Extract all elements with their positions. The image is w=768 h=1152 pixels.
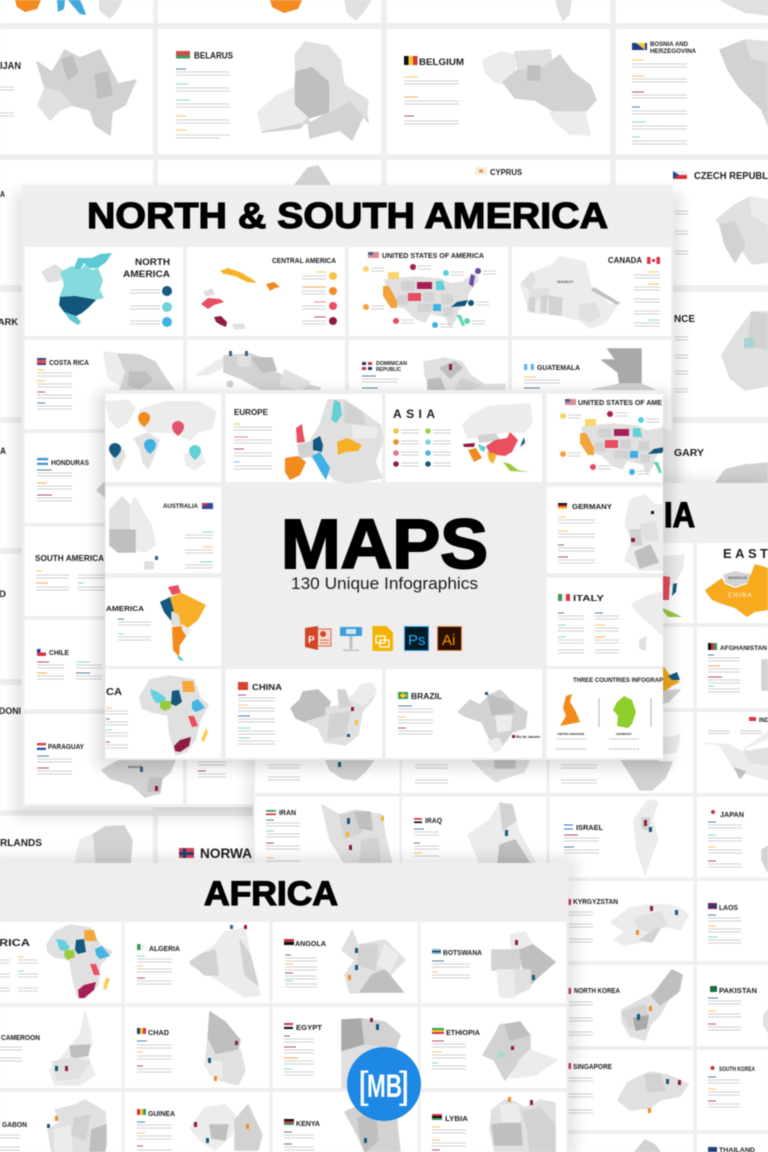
card: Costa Rica: COSTA RICA — [49, 358, 89, 367]
card: Cuba — [197, 351, 320, 390]
card: Afghanistan: AFGHANISTAN — [720, 645, 767, 652]
card: Brazil: Rio de Janeiro — [516, 735, 540, 739]
card: Kenya — [284, 1105, 400, 1152]
card: Honduras — [37, 458, 105, 501]
Belarus slide — [176, 42, 368, 140]
Netherlands slide: RLANDS — [0, 837, 42, 849]
icon: Photoshop — [404, 626, 428, 650]
card: Lybia — [432, 1097, 555, 1152]
card: Canada: NUNAVUT — [557, 280, 575, 284]
left edge slide labels: A — [0, 190, 5, 199]
card: Kenya: KENYA — [296, 1121, 320, 1128]
logo: MB badge — [347, 1047, 421, 1121]
card: East Asia: MONGOLIA — [728, 576, 748, 580]
card: North America — [42, 253, 172, 327]
heading: North & South America: NORTH & SOUTH AMERICA — [87, 195, 608, 236]
heading: Maps: MAPS — [281, 505, 488, 583]
card: East Asia: CHINA — [728, 593, 753, 599]
card: Algeria — [137, 925, 260, 997]
card: North America: NORTH — [135, 257, 170, 268]
card: Africa map — [0, 925, 112, 998]
card: Chile — [37, 649, 102, 679]
card: fragment above Iran — [268, 758, 375, 780]
card: Guinea: GUINEA — [148, 1111, 175, 1118]
card: Israel — [564, 800, 658, 874]
card: Africa — [106, 676, 208, 755]
card: Chad — [137, 1012, 245, 1085]
card: Botswana: BOTSWANA — [443, 950, 482, 957]
card: United States of America — [363, 252, 496, 328]
card: Canada: CANADA — [608, 256, 642, 265]
card: Thailand — [635, 1140, 755, 1152]
card: Asia: ASIA — [393, 407, 435, 421]
card: Three Countries Infographic — [556, 677, 664, 749]
Azerbaijan slide — [0, 50, 136, 135]
card: East Asia — [705, 546, 768, 617]
Hungary slide — [674, 448, 768, 484]
card: Chad: CHAD — [148, 1030, 169, 1037]
left edge slide labels: A — [0, 446, 6, 457]
Norway slide: NORWA — [200, 846, 252, 861]
card: Cameroon: CAMEROON — [1, 1035, 40, 1042]
icon: Google Slides — [372, 626, 393, 651]
card: Australia: AUSTRALIA — [163, 503, 198, 510]
icon: Keynote — [340, 627, 362, 651]
icon: Photoshop: Ps — [408, 632, 426, 649]
card: South America: AMERICA — [106, 604, 145, 613]
card: Brazil: BRAZIL — [411, 692, 442, 701]
card: South America — [106, 585, 206, 661]
card: Africa: CA — [106, 686, 122, 698]
card: Paraguay: PARAGUAY — [48, 744, 84, 751]
logo: MB badge: ] — [399, 1065, 410, 1107]
card: Kyrgyzstan — [568, 899, 688, 945]
card: Laos: LAOS — [719, 905, 738, 912]
Cyprus slide — [295, 166, 523, 185]
France slide — [674, 312, 768, 392]
panel: Maps cover — [97, 390, 675, 768]
logo: MB badge: [ — [358, 1065, 369, 1107]
Belarus slide: BELARUS — [194, 50, 233, 62]
card: map fragment with orange country — [650, 667, 680, 705]
card: United States of America: UNITED STATES OF AMERICA — [382, 253, 484, 260]
card: South America: SOUTH AMERICA — [35, 553, 104, 563]
card: Ethiopia: ETHIOPIA — [446, 1030, 480, 1037]
card: Dominican Republic: DOMINICAN — [376, 361, 407, 367]
card: Costa Rica — [37, 352, 174, 409]
left edge slide labels — [0, 190, 21, 717]
card: Europe: EUROPE — [234, 408, 269, 417]
card: Israel: ISRAEL — [576, 823, 603, 832]
card: Chile: CHILE — [49, 650, 69, 657]
Belgium slide — [404, 50, 596, 135]
Belgium slide: BELGIUM — [419, 57, 464, 68]
card: Pakistan: PAKISTAN — [719, 986, 757, 995]
card: Afghanistan — [708, 643, 768, 692]
card: Singapore — [568, 1063, 688, 1113]
card: Indonesia region fragment — [640, 735, 680, 790]
card: Asia map fragment — [650, 555, 684, 617]
card: Gabon: GABON — [2, 1122, 27, 1129]
France slide: NCE — [674, 313, 695, 325]
card: China — [238, 682, 376, 745]
heading: Asia: IA — [664, 496, 695, 535]
panel: North and South America — [15, 185, 680, 818]
card: Angola: ANGOLA — [295, 939, 327, 948]
icon: Illustrator — [438, 626, 462, 650]
card: Honduras: HONDURAS — [51, 460, 89, 467]
card: Three Countries Infographic: UNITED KINGDOM — [557, 732, 585, 736]
Bosnia and Herzegovina slide: HERZEGOVINA — [650, 48, 696, 55]
card: Kyrgyzstan: KYRGYZSTAN — [573, 899, 618, 906]
pin: blue — [144, 439, 156, 454]
top row map fragments — [15, 0, 768, 20]
Bosnia and Herzegovina slide — [632, 40, 768, 144]
card: India — [705, 717, 768, 780]
icon: Illustrator: Ai — [442, 632, 455, 649]
card: Ethiopia — [432, 1022, 557, 1080]
card: Lybia: LYBIA — [445, 1116, 468, 1123]
card: Egypt: EGYPT — [296, 1025, 323, 1032]
card: Australia — [110, 497, 213, 569]
card: China: CHINA — [252, 682, 282, 692]
heading: Africa: AFRICA — [204, 875, 338, 913]
card: Iraq — [414, 803, 536, 864]
card: Dominican Republic — [362, 358, 505, 390]
logo: MB badge: MB — [367, 1068, 402, 1104]
card: world map — [106, 400, 216, 472]
card: Paraguay — [37, 743, 175, 797]
card: Angola — [284, 930, 405, 993]
card: Laos — [708, 903, 741, 943]
card: North Korea: NORTH KOREA — [574, 988, 620, 995]
Azerbaijan slide: IJAN — [0, 60, 21, 72]
icon: PowerPoint: P — [308, 635, 315, 646]
card: Italy — [558, 592, 662, 653]
card: Egypt — [284, 1018, 400, 1088]
card: North Korea — [568, 970, 682, 1040]
card: Guinea — [137, 1105, 262, 1150]
card: Japan — [708, 808, 768, 872]
panel: background country slides — [0, 0, 768, 876]
card: Canada — [521, 256, 660, 328]
card: Gabon — [0, 1100, 107, 1152]
card: fragment above Iraq — [415, 758, 530, 783]
card: Japan: JAPAN — [720, 812, 744, 819]
card: fragment beside Paraguay — [198, 762, 226, 777]
card: Algeria: ALGERIA — [149, 944, 181, 953]
card: Iran: IRAN — [279, 810, 296, 817]
panel: Africa — [0, 857, 576, 1152]
panel: Asia — [247, 478, 768, 1152]
card: Paraguay: Asunción — [128, 765, 142, 769]
card: South Korea — [708, 1064, 755, 1107]
card: Europe — [234, 400, 383, 483]
card: East Asia: EAST — [723, 546, 768, 561]
card: fragment above Israel — [561, 758, 660, 790]
card: Cameroon — [0, 1012, 95, 1085]
card: Botswana — [432, 932, 555, 997]
card: Asia — [393, 404, 532, 472]
Cyprus slide: CYPRUS — [490, 168, 523, 177]
card: Italy: ITALY — [573, 594, 605, 603]
pin: navy — [109, 443, 121, 458]
card: Iraq: IRAQ — [425, 818, 443, 825]
card: North America: AMERICA — [123, 269, 170, 280]
card: Germany: GERMANY — [572, 502, 612, 511]
card: Guatemala — [524, 349, 655, 390]
Bosnia and Herzegovina slide: BOSNIA AND — [650, 41, 688, 48]
Netherlands slide — [0, 826, 132, 864]
card: Pakistan — [708, 986, 768, 1032]
card: South Korea: SOUTH KOREA — [719, 1066, 755, 1073]
pin: cyan — [189, 445, 201, 460]
Hungary slide: GARY — [674, 448, 704, 459]
card: United States of America crop — [560, 399, 675, 475]
icon: PowerPoint — [305, 626, 331, 650]
card: Germany — [558, 495, 662, 570]
card: Singapore: SINGAPORE — [573, 1064, 612, 1071]
subheading: 130 Unique Infographics: 130 Unique Infographics — [291, 574, 478, 593]
card: Guatemala: GUATEMALA — [537, 363, 581, 372]
card: Three Countries Infographic: GERMANY — [616, 732, 632, 736]
card: Dominican Republic: REPUBLIC — [376, 367, 401, 373]
card: Central America: CENTRAL AMERICA — [272, 256, 337, 265]
pin: red — [172, 421, 184, 436]
card: United States of America crop: UNITED STATES OF AME — [578, 400, 662, 407]
pin: orange — [138, 412, 150, 427]
card: Iran — [266, 805, 392, 864]
card: Central America — [201, 256, 337, 329]
card: South America — [35, 553, 105, 590]
Czech Republic slide — [673, 170, 768, 264]
card: Three Countries Infographic: THREE COUNTRIES INFOGRAP — [573, 677, 664, 684]
card: Brazil — [398, 690, 540, 752]
